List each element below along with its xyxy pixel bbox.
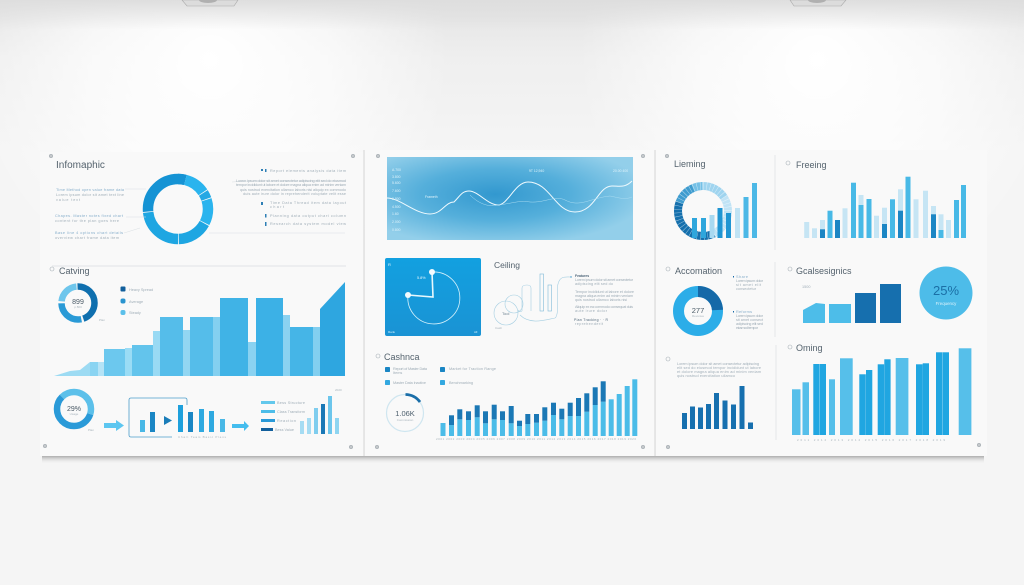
chart: small donut 899 bbox=[62, 286, 105, 322]
text block: donut left notes: content for the plan goes here bbox=[55, 219, 119, 223]
text block: small bars note bbox=[666, 357, 761, 378]
legend: horizontal bars: Bess Value bbox=[275, 428, 294, 432]
chart: wave line: A.700 bbox=[392, 168, 401, 172]
chart: wave line: 2.000 bbox=[392, 220, 401, 224]
arrow: to video panel bbox=[104, 420, 124, 431]
text block: small bars note: elit sed do eiusmod tempor incididunt ut labore bbox=[677, 366, 761, 370]
panel: left board bbox=[40, 150, 364, 456]
text block: process notes: Aliquip ex ea commodo consequat duis bbox=[575, 305, 633, 309]
chart: bottom donut 29% bbox=[57, 392, 94, 432]
chart: stepped area bars bbox=[54, 282, 345, 376]
legend: icon list: Market for Traction Range bbox=[449, 367, 496, 371]
text block: small bars note: et dolore magna aliqua enim ad minim veniam bbox=[677, 370, 761, 374]
chart: large paired bars bbox=[792, 348, 971, 442]
legend: icon list: Report of Master Data bbox=[393, 367, 428, 371]
text block: donut right notes: Time Data Thread item data layout bbox=[270, 201, 347, 205]
legend: horizontal bars: Bess Structure bbox=[277, 401, 305, 405]
text block: process notes: Plan Tracking · · R bbox=[574, 318, 609, 322]
chart: gauge 1.06k: 1.06K bbox=[395, 409, 415, 418]
callout: 25% circle bbox=[920, 266, 972, 320]
legend: small donut: Heavy Spread bbox=[129, 288, 153, 292]
heading: Oming: Oming bbox=[796, 343, 823, 353]
text block: donut left notes: Base line 4 options chart details bbox=[55, 231, 123, 235]
panel: video with bars: Chart Team Basic Plans bbox=[178, 435, 226, 439]
chart: bottom donut 29%: Plan bbox=[88, 428, 94, 432]
text block: donut notes: Share bbox=[736, 275, 748, 279]
diagram: line process: Tool bbox=[502, 311, 509, 316]
chart: wave line: 20.00 400 bbox=[613, 169, 628, 173]
text block: small bars note: quis nostrud exercitation ullamco bbox=[677, 374, 735, 378]
heading: Accomation: Accomation bbox=[675, 266, 722, 276]
callout: 25% circle: 25% bbox=[933, 283, 959, 298]
text block: small bars note: Lorem ipsum dolor sit amet consectetur adipiscing bbox=[677, 362, 759, 366]
legend: icon list: Items bbox=[393, 371, 402, 375]
card: clock diagram: R bbox=[388, 262, 391, 267]
chart: stacked bars over time bbox=[436, 379, 637, 441]
chart: four bars: 1500 bbox=[802, 285, 810, 289]
heading: Ceiling: Ceiling bbox=[494, 260, 520, 270]
legend: icon list: Master Data Inactive bbox=[393, 381, 426, 385]
chart: small donut 899: Plan bbox=[99, 318, 105, 322]
heading: Catving: Catving bbox=[59, 266, 90, 276]
heading: Freeing: Freeing bbox=[796, 160, 827, 170]
text block: process notes: adipiscing elit sed do bbox=[575, 282, 613, 286]
chart: small bars: 2020 bbox=[335, 388, 342, 392]
heading: Cashnca: Cashnca bbox=[384, 352, 420, 362]
card: clock diagram: Rank bbox=[388, 330, 396, 334]
chart: large paired bars: 2011 2012 2013 2014 2015 2016 2017 2018 2019 bbox=[797, 438, 945, 442]
card: clock diagram: All bbox=[474, 330, 478, 334]
heading: Learning: Lieming bbox=[674, 159, 706, 169]
chart: wave line bbox=[387, 157, 633, 240]
text block: donut notes: Lorem ipsum dolor bbox=[736, 314, 764, 318]
chart: wave line: 4.500 bbox=[392, 205, 401, 209]
chart: small dark bars bbox=[682, 386, 753, 429]
text block: donut right notes: tempor incididunt ut labore et dolore magna aliqua enim ad minim veniam bbox=[236, 183, 346, 187]
screws bbox=[43, 154, 355, 449]
text block: donut notes: Reforms bbox=[736, 310, 752, 314]
text block: donut left notes: overview chart frame data item bbox=[55, 236, 119, 240]
chart: small donut 899: p 800 bbox=[74, 305, 82, 309]
chart: donut 277: 277 bbox=[692, 306, 704, 315]
legend: small donut bbox=[120, 286, 153, 315]
chart: four bars bbox=[802, 284, 901, 323]
text block: donut left notes: Lorem ipsum dolor sit amet text line bbox=[56, 193, 124, 197]
text block: process notes: Features bbox=[575, 274, 589, 278]
card: clock diagram: 5.8% bbox=[417, 276, 426, 280]
chart: stacked bars over time: 2001 2002 2003 2004 2005 2006 2007 2008 2009 2010 2011 2012 2013 2014 2015 2016 2017 2018 2019 2020 bbox=[436, 437, 636, 441]
legend: icon list: Benchmarking bbox=[449, 381, 473, 385]
text block: process notes: Tempor incididunt ut labore et dolore bbox=[575, 290, 634, 294]
text block: donut notes: eiusmod tempor bbox=[736, 326, 759, 330]
panel: video with bars bbox=[129, 398, 226, 439]
chart: bottom donut 29%: 29% bbox=[67, 406, 81, 413]
ceiling light right bbox=[790, 0, 846, 6]
text block: process notes: magna aliqua enim ad minim veniam bbox=[575, 294, 633, 298]
chart: wave line: Frameth bbox=[425, 195, 438, 199]
chart: wave line: 1.60 bbox=[392, 212, 399, 216]
chart: wave line: 0.800 bbox=[392, 197, 401, 201]
legend: small donut: Steady bbox=[129, 311, 141, 315]
text block: donut right notes: Lorem ipsum dolor sit amet consectetur adipiscing elit sed do eiusmod bbox=[236, 179, 346, 183]
text block: donut right notes: duis aute irure dolor in reprehenderit voluptate velit esse bbox=[243, 192, 346, 196]
chart: donut 277 bbox=[678, 291, 718, 330]
text block: donut notes: sit amet consect bbox=[736, 318, 764, 322]
text block: process notes bbox=[570, 274, 634, 326]
chart: wave line: 0.800 bbox=[392, 228, 401, 232]
icon: play bbox=[164, 416, 172, 425]
chart: wave line: 3.800 bbox=[392, 175, 401, 179]
text block: donut right notes: chart bbox=[270, 205, 285, 209]
text block: donut left notes: value text bbox=[56, 198, 81, 202]
chart: main donut bbox=[148, 179, 208, 239]
card: clock diagram bbox=[385, 258, 481, 336]
text block: donut right notes: quis nostrud exercitation ullamco laboris nisi aliquip ex commodo bbox=[240, 188, 346, 192]
panel: right board bbox=[656, 150, 987, 456]
legend: horizontal bars: Class Transform bbox=[277, 410, 305, 414]
board shadow bbox=[42, 456, 984, 464]
heading: Infographic: Infomaphic bbox=[56, 160, 105, 171]
text block: process notes: quis nostrud ullamco laboris nisi bbox=[575, 298, 627, 302]
text block: donut notes bbox=[733, 275, 764, 330]
chart: wave line: 9T 12,940 bbox=[529, 169, 544, 173]
legend: horizontal bars: Reaction bbox=[277, 419, 296, 423]
chart: mixed bars bbox=[804, 177, 966, 238]
text block: donut right notes: Report elements analysis data item bbox=[270, 169, 346, 173]
diagram: line process: Cash bbox=[495, 326, 502, 330]
text block: donut left notes bbox=[55, 188, 125, 240]
chart: segmented ring bbox=[678, 183, 757, 238]
heading: Goalsesignics: Gcalsesignics bbox=[796, 266, 852, 276]
chart: donut 277: Revenue bbox=[692, 314, 704, 318]
chart: gauge 1.06k bbox=[386, 394, 424, 432]
legend: horizontal bars bbox=[261, 401, 305, 432]
text block: donut right notes: Planning data output chart column bbox=[270, 214, 346, 218]
text block: donut left notes: Chapes. Master notes fixed chart bbox=[55, 214, 124, 218]
callout: 25% circle: Frequency bbox=[936, 301, 957, 306]
chart: small donut 899: 899 bbox=[72, 299, 84, 306]
text block: donut right notes bbox=[236, 169, 347, 226]
ceiling light left bbox=[182, 0, 238, 6]
text block: process notes: Lorem ipsum dolor sit amet consectetur bbox=[575, 278, 634, 282]
text block: donut notes: Lorem ipsum dolor bbox=[736, 279, 764, 283]
chart: gauge 1.06k: Commission bbox=[397, 418, 414, 422]
chart: bottom donut 29%: Usage bbox=[70, 412, 79, 416]
text block: donut left notes: Time Method open value frame data bbox=[56, 188, 125, 192]
text block: donut notes: adipiscing elit sed bbox=[736, 322, 763, 326]
donut leader lines bbox=[124, 181, 346, 233]
diagram: line process bbox=[494, 274, 570, 330]
panel: middle board bbox=[365, 150, 655, 456]
text block: process notes: reprehenderit bbox=[575, 322, 604, 326]
arrow: to list and bars bbox=[232, 421, 249, 431]
legend: icon list bbox=[385, 367, 496, 385]
chart: wave line: 7.600 bbox=[392, 189, 401, 193]
text block: donut notes: consectetur bbox=[736, 287, 757, 291]
legend: small donut: Average bbox=[129, 300, 143, 304]
text block: donut right notes: Research data system model view bbox=[270, 222, 346, 226]
text block: donut notes: sit amet elit bbox=[736, 283, 762, 287]
chart: small bars bbox=[300, 388, 342, 434]
chart: wave line: 5.600 bbox=[392, 181, 401, 185]
text block: process notes: aute irure dolor bbox=[575, 309, 608, 313]
